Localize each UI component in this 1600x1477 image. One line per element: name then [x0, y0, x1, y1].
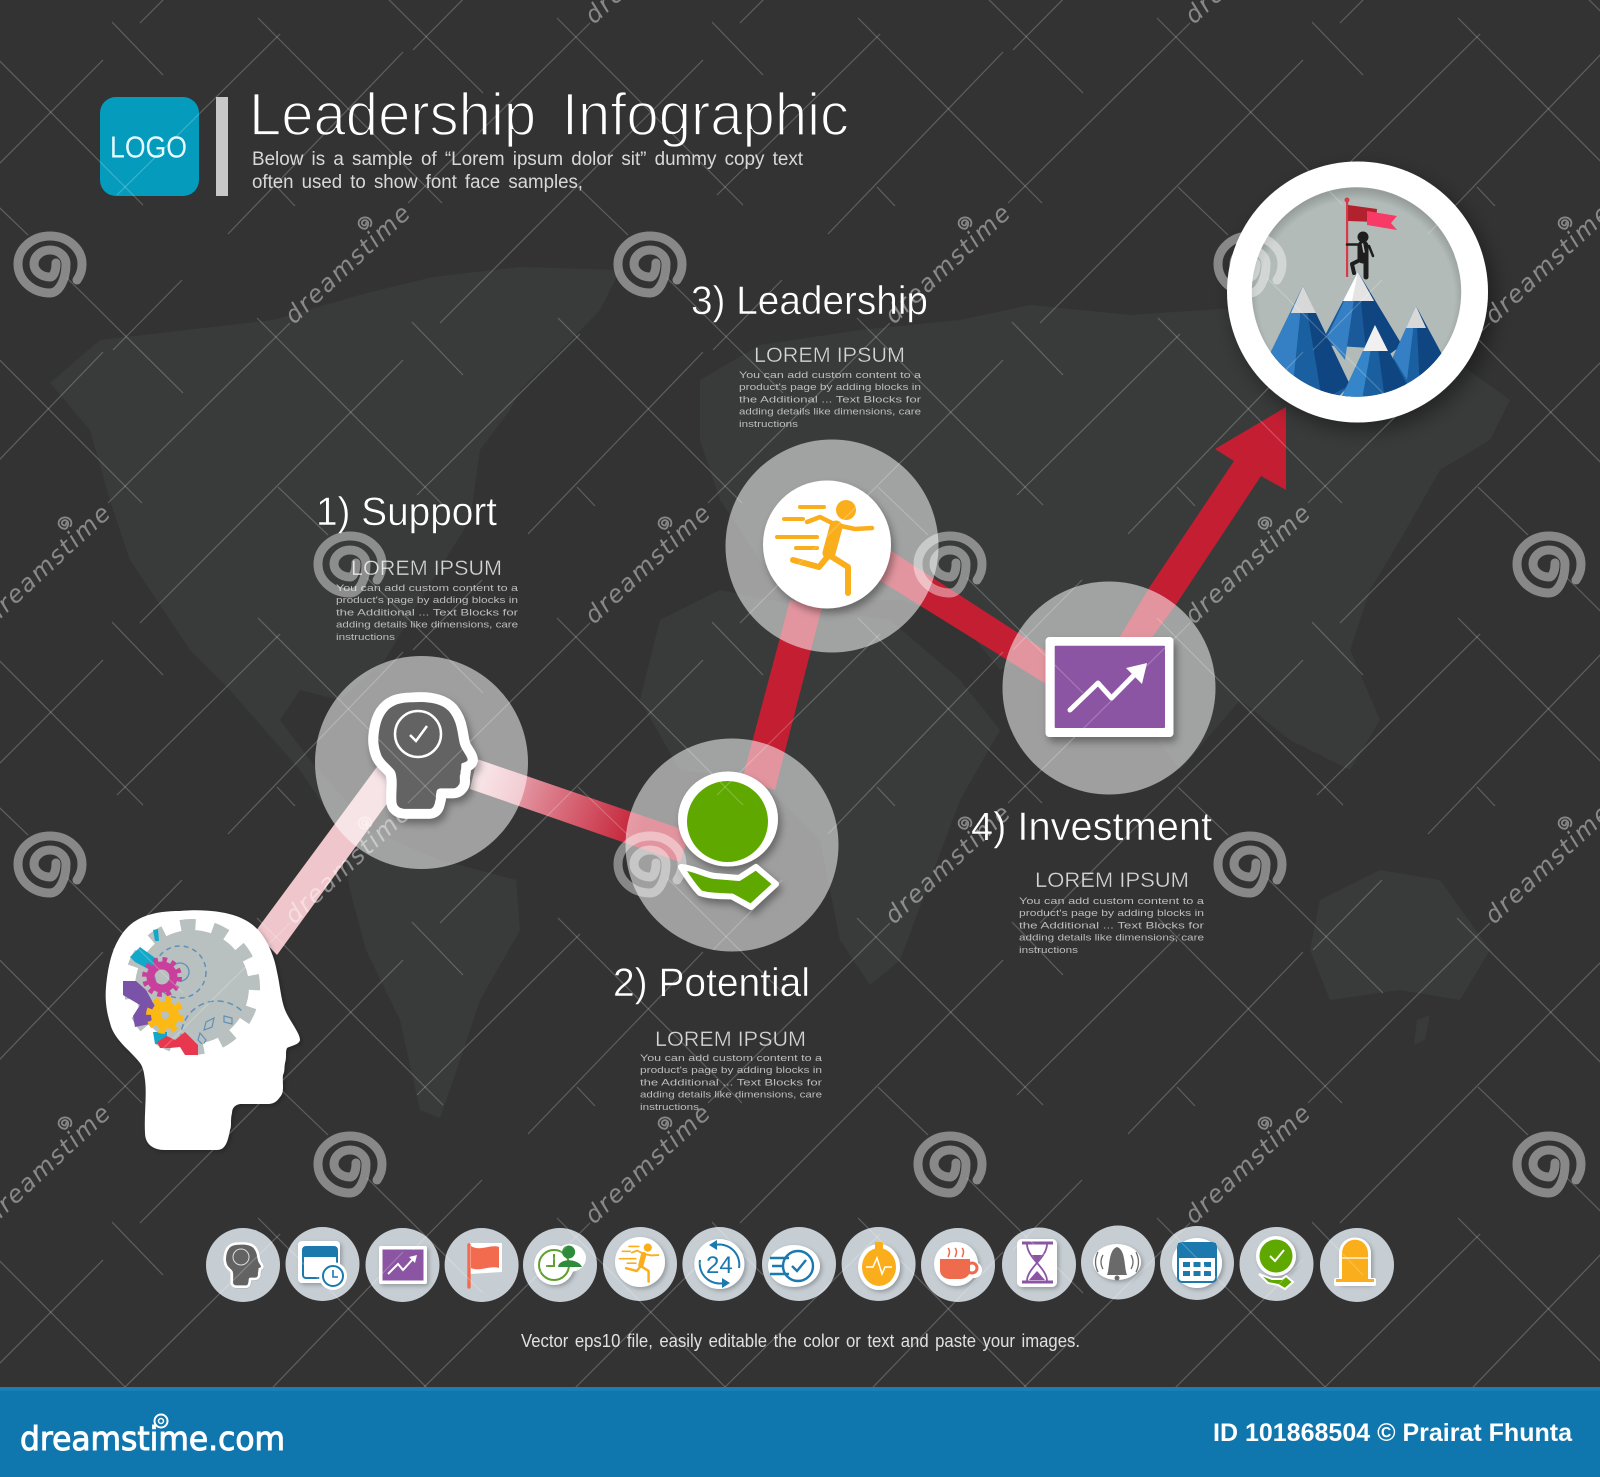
step 2: potential text: product's page by adding blocks in	[640, 1064, 822, 1075]
step 4: investment text: You can add custom content to a	[1019, 895, 1205, 906]
world map	[50, 267, 1510, 1118]
step 3: leadership text: product's page by adding blocks in	[739, 381, 921, 392]
step 4: investment text: the Additional ... Text Blocks for	[1019, 920, 1204, 930]
icon 10: coffee cup	[921, 1228, 995, 1302]
icon 2: calendar clock	[286, 1227, 360, 1301]
icon: goal circle with mountains	[1227, 162, 1488, 422]
icon 9: stopwatch	[842, 1227, 916, 1301]
growth arrow	[1118, 407, 1286, 640]
icon: potential hand holding green circle	[678, 772, 778, 907]
step 4: investment text: product's page by adding blocks in	[1019, 907, 1204, 918]
watermark text: dreamstime	[1179, 1098, 1317, 1229]
watermark text: dreamstime	[879, 198, 1017, 329]
step 3: leadership text: instructions	[739, 418, 798, 429]
step 1: support text: adding details like dimensions, care	[336, 618, 518, 630]
icon 11: hourglass	[1002, 1228, 1076, 1302]
path segment: head to support	[255, 756, 407, 955]
step 1: support text: You can add custom content to a	[336, 582, 519, 593]
step 4: investment text: 4) Investment	[971, 805, 1212, 849]
flag and pole	[1344, 198, 1397, 277]
path segment: leadership to investment	[866, 545, 1060, 684]
step 4: investment text	[971, 805, 1212, 955]
watermark copyright marks	[59, 217, 1571, 1129]
subtitle: Below is a sample of “Lorem ipsum dolor sit” dummy copy text	[252, 149, 804, 170]
icon 8: fast clock	[762, 1227, 836, 1301]
step 3: leadership text: the Additional ... Text Blocks for	[739, 394, 921, 404]
step 4: investment text: instructions	[1019, 944, 1078, 955]
watermark text: dreamstime	[579, 1098, 717, 1229]
watermark text: dreamstime	[279, 798, 417, 929]
title divider bar	[216, 97, 228, 196]
image id and credit: ID 101868504 © Prairat Fhunta	[1213, 1419, 1573, 1447]
icon 1: head	[206, 1228, 280, 1302]
step 1: support text: LOREM IPSUM	[351, 557, 502, 580]
step circle: investment	[1002, 582, 1216, 794]
logo badge: LOGO	[110, 130, 187, 164]
icon 5: clock and person	[523, 1228, 597, 1302]
step 2: potential text: adding details like dimensions, care	[640, 1088, 822, 1100]
logo badge	[100, 97, 199, 196]
watermark text: dreamstime	[279, 198, 417, 329]
step 1: support text: instructions	[336, 631, 395, 642]
cyan and purple gears	[123, 929, 167, 1044]
subtitle: often used to show font face samples,	[252, 172, 583, 193]
step 4: investment text: LOREM IPSUM	[1035, 869, 1189, 892]
title: Leadership Infographic	[249, 81, 849, 148]
icon 7: 24 hours: 24	[706, 1252, 733, 1279]
magenta gear	[144, 960, 180, 994]
step 2: potential text: instructions	[640, 1101, 699, 1112]
icon: leadership runner	[763, 480, 891, 608]
icon 7: 24 hours	[682, 1227, 756, 1301]
step 2: potential text	[613, 961, 823, 1112]
step 1: support text	[316, 490, 519, 642]
subtitle	[252, 149, 804, 193]
grey gear	[124, 919, 260, 1055]
step 4: investment text: adding details like dimensions, care	[1019, 932, 1204, 942]
icon 3: chart	[366, 1228, 440, 1302]
step 3: leadership text: adding details like dimensions, care	[739, 406, 921, 416]
icon: support head	[378, 702, 468, 809]
climber	[1347, 232, 1373, 277]
icon 12: bell	[1081, 1226, 1155, 1300]
step 1: support text: 1) Support	[316, 490, 497, 534]
yellow gear	[149, 999, 181, 1031]
banner logo: dreamstime.com	[20, 1419, 285, 1458]
step 2: potential text: You can add custom content to a	[640, 1052, 823, 1063]
watermark text: dreamstime	[879, 798, 1017, 929]
path segment: potential to leadership	[742, 600, 822, 790]
step circle: potential	[626, 738, 838, 952]
icon row	[206, 1226, 1394, 1302]
step circle: support	[315, 656, 528, 869]
step 1: support text: product's page by adding blocks in	[336, 594, 518, 605]
watermark spirals	[18, 236, 1581, 1193]
icon 15: milestone	[1320, 1228, 1394, 1302]
step 3: leadership text: LOREM IPSUM	[754, 344, 905, 367]
icon: investment chart	[1046, 637, 1174, 737]
step 3: leadership text: You can add custom content to a	[739, 369, 922, 380]
step 2: potential text: 2) Potential	[613, 961, 810, 1005]
step 2: potential text: LOREM IPSUM	[655, 1028, 806, 1051]
footer caption: Vector eps10 file, easily editable the color or text and paste your images.	[521, 1331, 1080, 1351]
icon 14: clock on hand	[1240, 1227, 1314, 1301]
icon: big head with gears	[106, 910, 300, 1150]
mountains	[1270, 272, 1442, 397]
path segment: support to potential	[470, 759, 690, 862]
step circle: leadership	[726, 440, 938, 652]
icon 4: flag	[445, 1228, 519, 1302]
step 3: leadership text	[691, 279, 928, 429]
icon 13: calendar	[1160, 1226, 1234, 1300]
step 3: leadership text: 3) Leadership	[691, 279, 928, 323]
step 2: potential text: the Additional ... Text Blocks for	[640, 1076, 822, 1088]
step 1: support text: the Additional ... Text Blocks for	[336, 606, 518, 618]
watermark text: dreamstime	[579, 498, 717, 629]
footer banner	[0, 1387, 1600, 1477]
watermark text: dreamstime	[1179, 498, 1317, 629]
red gear	[157, 1032, 198, 1055]
icon 6: runner	[603, 1227, 677, 1301]
